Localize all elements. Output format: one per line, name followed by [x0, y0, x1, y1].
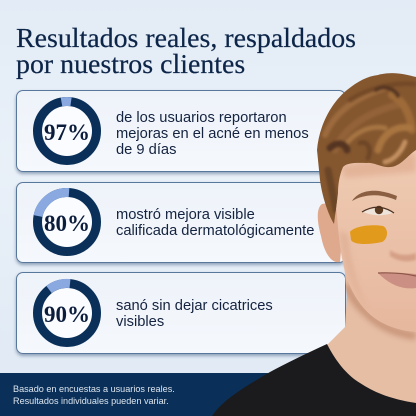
lip line: [378, 273, 416, 276]
face: [336, 145, 416, 332]
title: por nuestros clientes: [16, 48, 245, 80]
footer disclaimer: [13, 384, 175, 406]
shadow under jaw: [346, 285, 416, 336]
text: stat 90% description: sanó sin dejar cicatrices: [116, 298, 273, 314]
eye: [363, 208, 393, 215]
text: stat 97% description: mejoras en el acné en menos: [116, 126, 309, 142]
title: Resultados reales, respaldados: [16, 23, 356, 54]
acne patch: [350, 225, 387, 244]
eyebrow: [352, 191, 397, 201]
t-shirt: [212, 344, 416, 416]
title: [16, 23, 356, 80]
nose shadow: [390, 250, 416, 261]
neck: [327, 262, 416, 410]
text: stat 97% description: de 9 días: [116, 142, 176, 158]
text: stat 97% description: de los usuarios reportaron: [116, 110, 287, 126]
footer disclaimer: Resultados individuales pueden variar.: [13, 396, 169, 406]
forehead shade: [340, 152, 416, 178]
iris: [375, 206, 383, 214]
text: stat 90% description: [116, 298, 273, 330]
hair: [317, 73, 416, 224]
donut: 80%: [38, 192, 96, 252]
donut: 80%: 80%: [44, 211, 90, 236]
donut: 90%: 90%: [44, 302, 90, 327]
footer disclaimer: Basado en encuestas a usuarios reales.: [13, 384, 175, 394]
panel: stat 90%: [16, 272, 346, 354]
photo: young man with acne patch: [212, 65, 416, 416]
text: stat 80% description: [116, 207, 314, 239]
text: stat 80% description: calificada dermatológicamente: [116, 223, 314, 239]
lips: [378, 273, 416, 288]
ear: [318, 203, 344, 262]
jaw shade: [339, 230, 370, 314]
donut charts: [33, 73, 416, 416]
eyelid: [362, 207, 394, 213]
footer band: [0, 373, 416, 416]
text: stat 90% description: visibles: [116, 314, 164, 330]
donut: 97%: [38, 102, 96, 160]
panel: stat 80%: [16, 182, 346, 263]
text: stat 80% description: mostró mejora visible: [116, 207, 255, 223]
donut: 97%: 97%: [44, 120, 90, 145]
text: stat 97% description: [116, 110, 309, 158]
donut: 90%: [38, 283, 96, 342]
panel: stat 97%: [16, 90, 346, 172]
